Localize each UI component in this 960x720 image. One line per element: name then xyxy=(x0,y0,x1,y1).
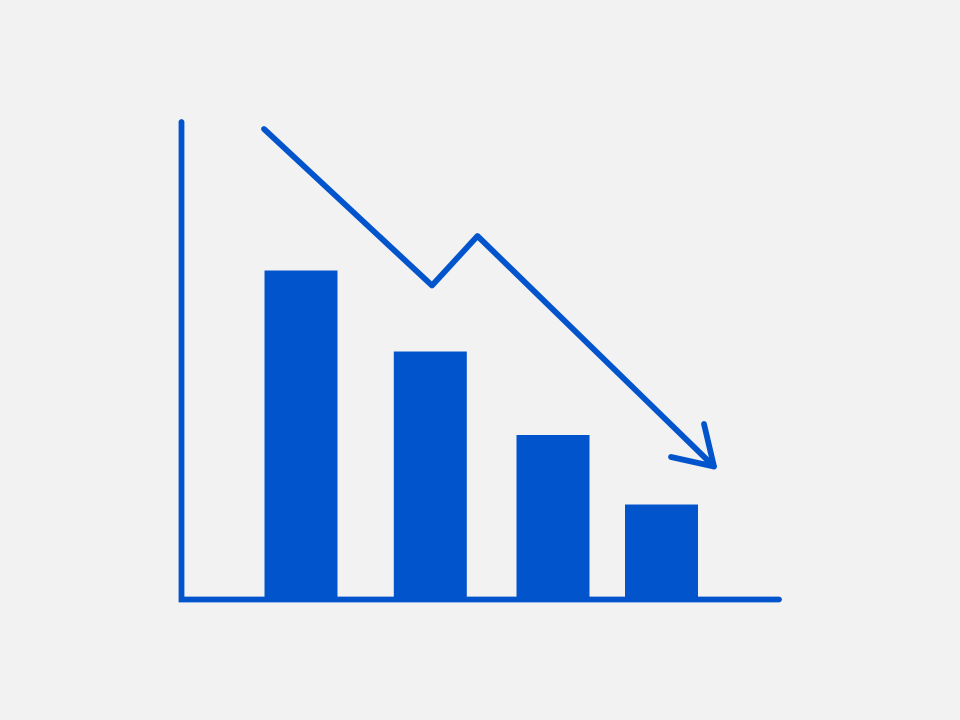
bar 2 xyxy=(394,352,467,600)
bar 4 xyxy=(625,504,698,600)
bars xyxy=(264,270,698,600)
chart axes xyxy=(182,122,779,600)
bar 3 xyxy=(516,435,590,600)
trend line xyxy=(264,129,714,466)
downward trend arrow xyxy=(264,129,714,466)
bar 1 xyxy=(264,270,338,600)
arrow head xyxy=(671,424,714,466)
